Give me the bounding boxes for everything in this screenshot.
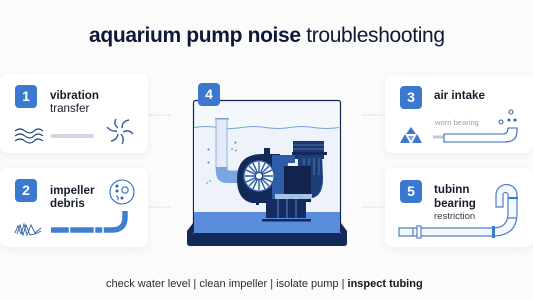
badge 4 bbox=[198, 83, 220, 106]
bar bbox=[51, 134, 94, 138]
heading: tubinn bearing bbox=[434, 183, 476, 210]
badge 3: 3 bbox=[407, 89, 415, 105]
label: worn bearing: worn bearing bbox=[435, 118, 479, 127]
footer action list: check water level | clean impeller | isolate pump | inspect tubing bbox=[106, 278, 423, 290]
heading: impeller debris: debris bbox=[50, 197, 85, 210]
heading: impeller debris bbox=[50, 184, 94, 210]
icon: debris circle bbox=[109, 180, 135, 204]
badge 1 bbox=[15, 85, 37, 108]
title: aquarium pump noise troubleshooting bbox=[89, 24, 445, 47]
pipe with segments bbox=[51, 211, 128, 233]
badge 2 bbox=[15, 179, 37, 202]
heading: vibration transfer: transfer bbox=[50, 102, 89, 115]
heading: tubinn bearing: tubinn bbox=[434, 183, 469, 196]
badge 4: 4 bbox=[205, 86, 213, 102]
badge 3 bbox=[400, 86, 422, 109]
tank base bbox=[187, 223, 347, 246]
tank glass bbox=[194, 100, 340, 234]
panel: tubing bearing restriction bbox=[385, 168, 533, 247]
badge 1: 1 bbox=[22, 88, 30, 104]
icon: triangles bbox=[400, 127, 422, 143]
icon: ripple lines bbox=[14, 222, 42, 236]
heading: vibration transfer: vibration bbox=[50, 89, 99, 102]
icon: waves bbox=[14, 128, 44, 144]
badge 2: 2 bbox=[22, 182, 30, 198]
panel: impeller debris bbox=[0, 168, 148, 247]
heading: impeller debris: impeller bbox=[50, 184, 94, 197]
label: restriction: restriction bbox=[434, 211, 475, 222]
badge 5 bbox=[400, 180, 422, 203]
badge 5: 5 bbox=[407, 183, 415, 199]
heading: air intake: air intake bbox=[434, 89, 485, 102]
panel: vibration transfer bbox=[0, 74, 148, 153]
intake tube bbox=[215, 118, 238, 183]
pipe bbox=[398, 184, 518, 239]
panel: air intake bbox=[385, 75, 533, 153]
icon: swirl fan bbox=[106, 118, 134, 144]
air pipe with bubbles bbox=[433, 110, 518, 142]
heading: tubinn bearing: bearing bbox=[434, 196, 476, 210]
heading: vibration transfer bbox=[50, 89, 99, 115]
bubbles bbox=[206, 141, 237, 184]
pump bbox=[237, 141, 327, 222]
